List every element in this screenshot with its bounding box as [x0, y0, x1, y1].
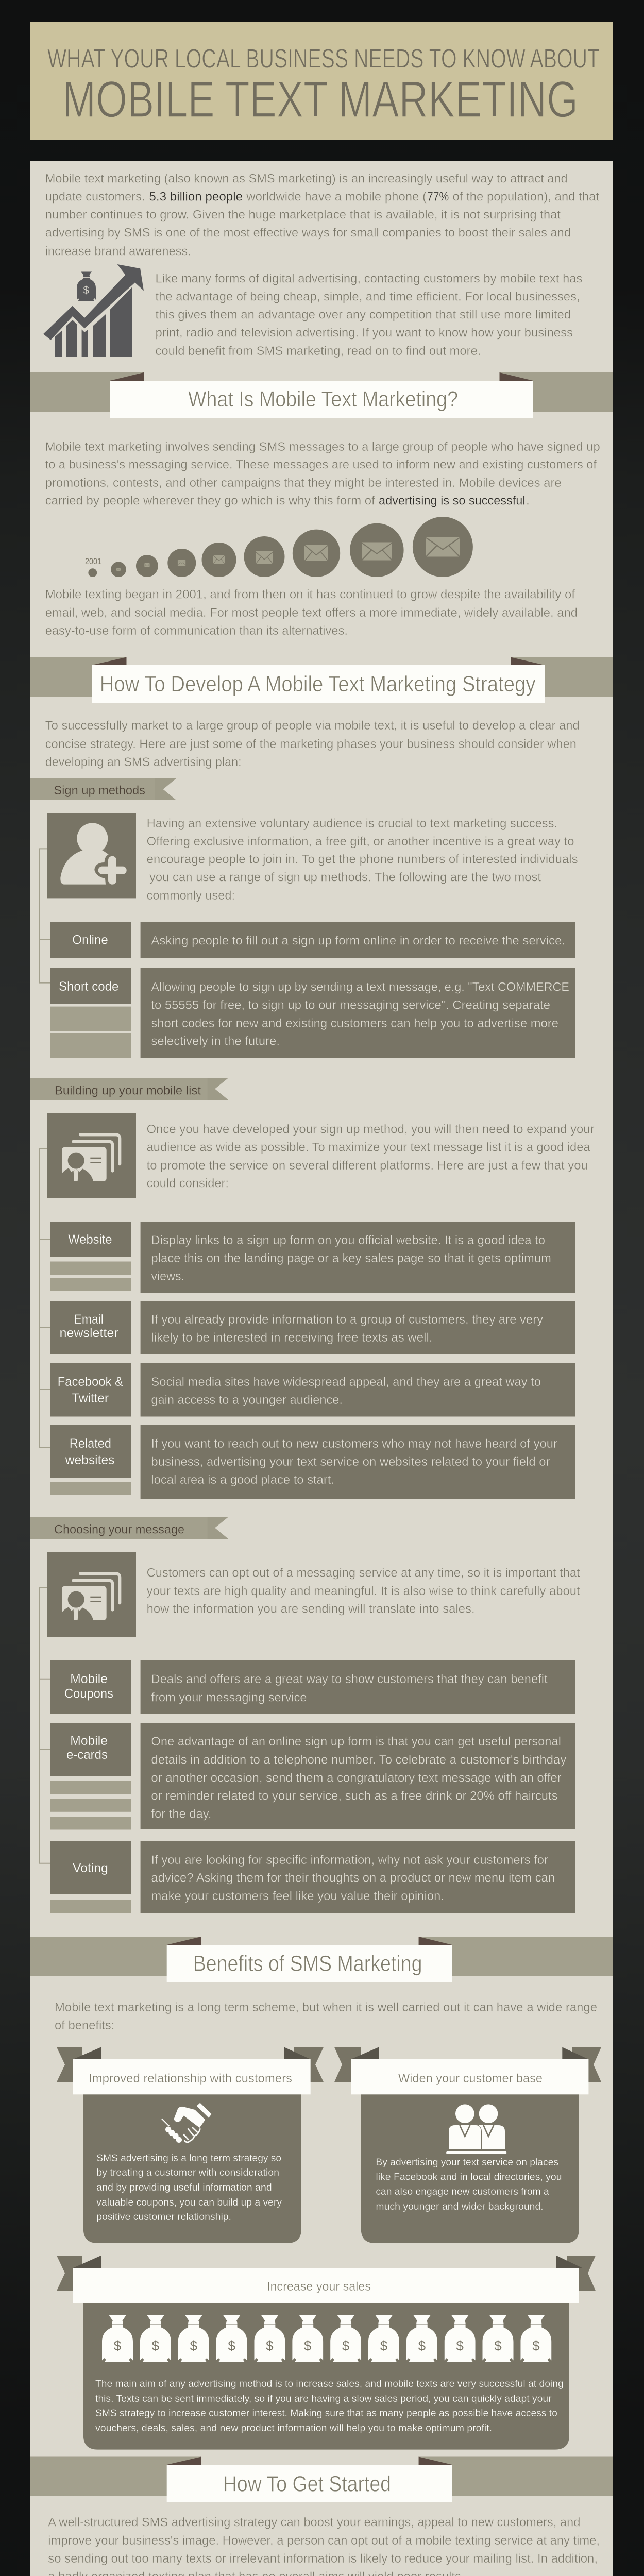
section banner: How To Develop A Mobile Text Marketing Strategy: [30, 657, 613, 703]
tag: Sign up methods: [30, 778, 176, 800]
section banner: How To Develop A Mobile Text Marketing Strategy: How To Develop A Mobile Text Marketing Strategy: [100, 672, 536, 697]
growth chart: envelope bubbles from 2001: [85, 517, 473, 577]
row: Online: Online: [72, 933, 108, 947]
row: Email newsletter: likely to be interested in receiving free texts as well.: [151, 1331, 432, 1345]
card: Increase your sales: $: [152, 2338, 160, 2353]
card: Increase your sales: SMS strategy to increase customer interest. Making sure that as many people as possible have access to: [95, 2408, 557, 2419]
building list text: to promote the service on several different platforms. Here are just a few that you: [147, 1159, 588, 1173]
benefits intro: [55, 2001, 597, 2032]
row: Facebook and Twitter: [50, 1363, 575, 1417]
sign up methods text: you can use a range of sign up methods. The following are the two most: [149, 871, 541, 885]
row: Short code: Short code: [59, 979, 118, 994]
choosing message text: your texts are high quality and meaningful. It is also wise to think carefully about: [147, 1584, 580, 1598]
row: Mobile e-cards: details in addition to a telephone number. To celebrate a customer's birthday: [151, 1753, 567, 1767]
row: Mobile Coupons: [50, 1660, 575, 1714]
tag: Building up your mobile list: [30, 1078, 228, 1100]
row: Website: place this on the landing page or a key sales page so that it gets optimum: [151, 1251, 551, 1265]
card: Improved relationship with customers: positive customer relationship.: [96, 2211, 231, 2223]
strategy intro paragraph: concise strategy. Here are just some of the marketing phases your business should consider when: [45, 737, 577, 751]
intro paragraph: number continues to grow. Given the huge marketplace that is available, it is not surprising that: [45, 208, 561, 222]
definition paragraph: promotions, contests, and other campaigns that they might be interested in. Mobile devices are: [45, 476, 562, 490]
row: Email newsletter: Email: [74, 1312, 104, 1327]
getting started paragraph: A well-structured SMS advertising strategy can boost your earnings, appeal to new customers, and: [48, 2516, 580, 2530]
icon row: money bags: [102, 2315, 551, 2362]
card: Widen your customer base: much younger and wider background.: [376, 2201, 544, 2212]
intro paragraph 2: [156, 272, 582, 358]
row: Short code: selectively in the future.: [151, 1035, 280, 1048]
intro paragraph: 77%: [427, 190, 449, 204]
icon: handshake: [162, 2103, 212, 2143]
tag: Building up your mobile list: Building up your mobile list: [55, 1084, 201, 1097]
definition paragraph: [45, 440, 600, 508]
strategy intro paragraph: developing an SMS advertising plan:: [45, 755, 242, 769]
tag: Choosing your message: Choosing your message: [54, 1523, 184, 1536]
card: Increase your sales: $: [532, 2338, 540, 2353]
intro paragraph: increase brand awareness.: [45, 244, 191, 258]
row: Mobile e-cards: for the day.: [151, 1807, 211, 1821]
icon box: add user: [47, 813, 136, 898]
card: Increase your sales: $: [342, 2338, 350, 2353]
card: Increase your sales: $: [418, 2338, 426, 2353]
row: Email newsletter: newsletter: [60, 1326, 118, 1340]
section banner: How To Get Started: How To Get Started: [223, 2471, 391, 2496]
row: Short code: [50, 968, 575, 1058]
row: Related websites: local area is a good place to start.: [151, 1473, 334, 1487]
building list text: [147, 1122, 595, 1191]
row: Voting: advice? Asking them for their thoughts on a product or new menu item can: [151, 1871, 555, 1885]
row: Mobile e-cards: One advantage of an online sign up form is that you can get useful personal: [151, 1735, 561, 1749]
card: Increase your sales: $: [494, 2338, 502, 2353]
row: Mobile Coupons: Deals and offers are a great way to show customers that they can benefit: [151, 1672, 548, 1686]
building list text: could consider:: [147, 1177, 229, 1191]
card: Increase your sales: $: [266, 2338, 274, 2353]
intro paragraph: update customers.: [45, 190, 145, 204]
intro paragraph: worldwide have a mobile phone (: [246, 190, 427, 204]
section banner: How To Get Started: [30, 2456, 613, 2502]
card: Widen your customer base: [334, 2047, 601, 2243]
section banner: What Is Mobile Text Marketing?: [30, 372, 613, 418]
row: Online: [50, 922, 575, 958]
strategy intro paragraph: [45, 719, 580, 769]
connector: building list: [39, 1149, 50, 1448]
icon box: contact cards: [47, 1113, 136, 1198]
row: Voting: make your customers feel like you value their opinion.: [151, 1889, 444, 1903]
paragraph: texting history: Mobile texting began in 2001, and from then on it has continued to grow despite the availability of: [45, 588, 575, 602]
icon: growth chart with money bag: [43, 264, 144, 357]
row: Related websites: If you want to reach out to new customers who may not have heard of your: [151, 1437, 557, 1451]
row: Email newsletter: [50, 1301, 575, 1354]
intro paragraph: of the population), and that: [452, 190, 599, 204]
row: Mobile e-cards: or reminder related to your service, such as a free drink or 20% off haircuts: [151, 1789, 558, 1803]
row: Facebook and Twitter: Twitter: [72, 1391, 109, 1405]
card: Increase your sales: The main aim of any advertising method is to increase sales, and mobile texts are very successful at doing: [95, 2378, 564, 2389]
definition paragraph: Mobile text marketing involves sending SMS messages to a large group of people who have signed up: [45, 440, 600, 454]
card: Improved relationship with customers: SMS advertising is a long term strategy so: [96, 2153, 281, 2164]
row: Mobile e-cards: or another occasion, send them a congratulatory text message with an offer: [151, 1771, 562, 1785]
card: Widen your customer base: can also engage new customers from a: [376, 2186, 549, 2197]
icon: growth chart with money bag: $: [83, 285, 89, 296]
row: Mobile Coupons: Mobile: [70, 1672, 108, 1686]
row: Related websites: business, advertising your text service on websites related to your field or: [151, 1455, 550, 1469]
intro paragraph 2: could benefit from SMS marketing, read on to find out more.: [156, 344, 481, 358]
row: Mobile e-cards: Mobile: [70, 1734, 108, 1748]
row: Facebook and Twitter: Social media sites have widespread appeal, and they are a great way to: [151, 1375, 541, 1389]
connector: choosing message: [39, 1588, 50, 1863]
paragraph: texting history: [45, 588, 578, 638]
tag: Sign up methods: Sign up methods: [54, 784, 145, 798]
card: Improved relationship with customers: valuable coupons, you can build up a very: [96, 2197, 282, 2208]
card: Increase your sales: [57, 2256, 596, 2450]
row: Voting: Voting: [73, 1861, 108, 1875]
getting started paragraph: [48, 2516, 600, 2576]
card: Increase your sales: $: [380, 2338, 388, 2353]
row: Mobile e-cards: [50, 1723, 575, 1830]
strategy intro paragraph: To successfully market to a large group of people via mobile text, it is useful to develop a clear and: [45, 719, 580, 733]
card: Widen your customer base: Widen your customer base: [398, 2072, 543, 2086]
definition paragraph: .: [526, 494, 530, 508]
intro paragraph: Mobile text marketing (also known as SMS marketing) is an increasingly useful way to attract and: [45, 172, 568, 186]
card: Increase your sales: $: [304, 2338, 312, 2353]
card: Increase your sales: $: [228, 2338, 235, 2353]
row: Email newsletter: If you already provide information to a group of customers, they are very: [151, 1313, 544, 1327]
row: Website: views.: [151, 1269, 184, 1283]
row: Website: [50, 1222, 575, 1293]
sign up methods text: commonly used:: [147, 889, 235, 903]
row: Online: Asking people to fill out a sign up form online in order to receive the service.: [151, 934, 565, 948]
row: Mobile Coupons: from your messaging service: [151, 1691, 307, 1704]
row: Website: Website: [68, 1232, 112, 1247]
building list text: Once you have developed your sign up method, you will then need to expand your: [147, 1122, 595, 1137]
row: Short code: to 55555 for free, to sign up to our messaging service". Creating separate: [151, 998, 550, 1012]
card: Increase your sales: Increase your sales: [267, 2280, 371, 2294]
connector: sign up methods: [39, 849, 50, 983]
intro paragraph: [45, 172, 599, 258]
intro paragraph 2: the advantage of being cheap, simple, and time efficient. For local businesses,: [156, 290, 580, 304]
choosing message text: Customers can opt out of a messaging service at any time, so it is important that: [147, 1566, 580, 1580]
card: Increase your sales: this. Texts can be sent immediately, so if you are having a slow sales period, you can quickly adapt your: [95, 2393, 552, 2404]
tag: Choosing your message: [30, 1517, 228, 1539]
icon box: message cards: [47, 1552, 136, 1637]
paragraph: texting history: email, web, and social media. For most people text offers a more immediate, widely available, and: [45, 606, 578, 620]
row: Mobile Coupons: Coupons: [64, 1686, 113, 1701]
paragraph: texting history: easy-to-use form of communication than its alternatives.: [45, 624, 348, 638]
sign up methods text: Offering exclusive information, a free gift, or another incentive is a great way to: [147, 835, 574, 849]
intro paragraph 2: print, radio and television advertising. If you want to know how your business: [156, 326, 573, 340]
growth chart: envelope bubbles from 2001: 2001: [85, 556, 101, 566]
choosing message text: [147, 1566, 580, 1616]
card: Improved relationship with customers: Improved relationship with customers: [89, 2072, 292, 2086]
row: Related websites: [50, 1425, 575, 1499]
row: Website: Display links to a sign up form on you official website. It is a good idea to: [151, 1233, 545, 1247]
definition paragraph: carried by people wherever they go which is why this form of: [45, 494, 375, 508]
card: Increase your sales: $: [456, 2338, 464, 2353]
sign up methods text: [147, 817, 578, 903]
card: Increase your sales: $: [114, 2338, 122, 2353]
getting started paragraph: so sending out too many texts or irrelevant information is likely to reduce your mailing list. In addition,: [48, 2552, 598, 2566]
row: Related websites: Related: [70, 1436, 111, 1451]
card: Improved relationship with customers: [57, 2047, 324, 2243]
row: Voting: If you are looking for specific information, why not ask your customers for: [151, 1853, 548, 1867]
section banner: What Is Mobile Text Marketing?: What Is Mobile Text Marketing?: [188, 387, 458, 412]
row: Short code: Allowing people to sign up by sending a text message, e.g. "Text COMMERCE: [151, 980, 569, 994]
card: Widen your customer base: By advertising your text service on places: [376, 2157, 558, 2168]
intro paragraph: 5.3 billion people: [149, 190, 243, 204]
benefits intro: of benefits:: [55, 2019, 114, 2032]
row: Related websites: websites: [65, 1453, 114, 1467]
intro paragraph 2: this gives them an advantage over any competition that still use more limited: [156, 308, 571, 321]
building list text: audience as wide as possible. To maximize your text message list it is a good idea: [147, 1141, 590, 1155]
section banner: Benefits of SMS Marketing: [30, 1937, 613, 1982]
card: Increase your sales: vouchers, deals, sales, and new product information will help you to make optimum profit.: [95, 2422, 492, 2434]
getting started paragraph: improve your business's image. However, a person can opt out of a mobile texting service at any time,: [48, 2534, 600, 2548]
row: Voting: [50, 1841, 575, 1913]
choosing message text: how the information you are sending will translate into sales.: [147, 1602, 475, 1616]
sign up methods text: encourage people to join in. To get the phone numbers of interested individuals: [147, 852, 578, 867]
card: Increase your sales: $: [190, 2338, 197, 2353]
benefits intro: Mobile text marketing is a long term scheme, but when it is well carried out it can have a wide range: [55, 2001, 597, 2014]
header banner: [30, 22, 613, 140]
row: Facebook and Twitter: gain access to a younger audience.: [151, 1393, 343, 1407]
row: Facebook and Twitter: Facebook &: [58, 1375, 123, 1389]
card: Widen your customer base: like Facebook and in local directories, you: [376, 2172, 562, 2183]
row: Short code: short codes for new and existing customers can help you to advertise more: [151, 1016, 558, 1030]
definition paragraph: to a business's messaging service. These messages are used to inform new and existing customers of: [45, 458, 597, 472]
card: Improved relationship with customers: by treating a customer with consideration: [96, 2167, 279, 2178]
definition paragraph: advertising is so successful: [379, 494, 526, 508]
card: Improved relationship with customers: and by providing useful information and: [96, 2182, 272, 2193]
row: Mobile e-cards: e-cards: [66, 1748, 108, 1762]
intro paragraph: advertising by SMS is one of the most effective ways for small companies to boost their sales and: [45, 226, 571, 240]
section banner: Benefits of SMS Marketing: Benefits of SMS Marketing: [193, 1952, 422, 1976]
sign up methods text: Having an extensive voluntary audience is crucial to text marketing success.: [147, 817, 557, 831]
icon: two people: [446, 2104, 506, 2154]
intro paragraph 2: Like many forms of digital advertising, contacting customers by mobile text has: [156, 272, 582, 285]
